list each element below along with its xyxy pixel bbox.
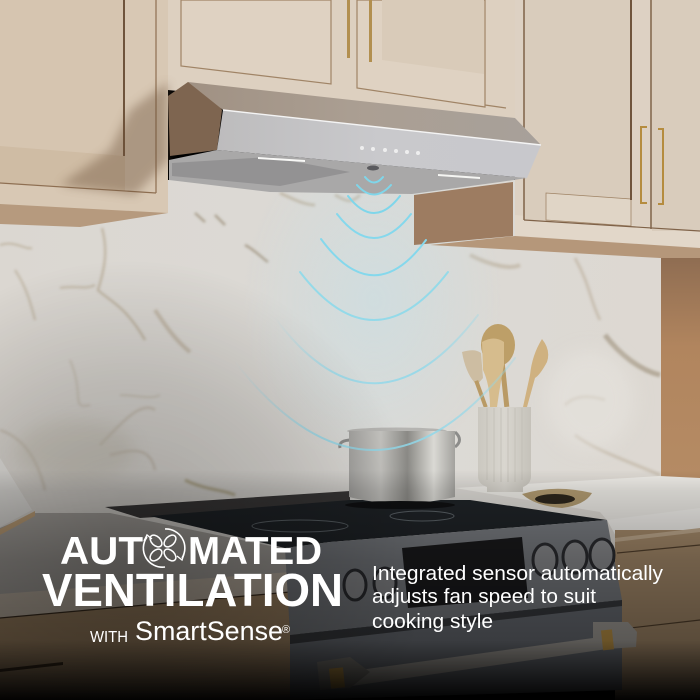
left text shade — [0, 260, 430, 700]
utensil vase — [478, 407, 531, 492]
description text: Integrated sensor automatically — [372, 562, 664, 585]
oven mitt — [522, 489, 592, 508]
subtitle: with SmartSense: WITH — [90, 629, 128, 646]
upper cabinet left — [0, 0, 168, 227]
hood light bar — [258, 157, 305, 162]
hood control buttons — [360, 146, 420, 155]
wooden spatula — [482, 338, 504, 407]
hood light bar right — [438, 174, 480, 179]
upper cabinet centre — [168, 0, 520, 125]
range — [105, 491, 637, 700]
sensor waves — [235, 177, 515, 450]
spoon right — [523, 339, 548, 407]
hood top face — [188, 82, 541, 145]
title line 2: VENTILATION — [42, 564, 343, 616]
description text: cooking style — [372, 610, 493, 633]
wall wood panel — [661, 258, 700, 480]
subtitle: with SmartSense: ® — [282, 624, 290, 636]
counter right — [455, 476, 700, 700]
hood underside — [169, 150, 527, 194]
door handles — [641, 127, 663, 204]
marble backsplash — [0, 130, 700, 550]
subtitle: with SmartSense: SmartSense — [135, 616, 283, 646]
upper cabinet right — [414, 0, 700, 258]
centre door left — [181, 0, 331, 84]
cooktop grates — [105, 491, 350, 518]
hood sensor — [367, 166, 379, 170]
stock pot — [340, 428, 460, 509]
title line 1 left: AUT — [60, 530, 143, 573]
right door two — [652, 0, 700, 231]
knobs — [344, 539, 614, 600]
cooktop glass — [150, 500, 607, 548]
wood side under hood — [414, 182, 513, 245]
hood left side — [168, 82, 222, 156]
drawer handle — [0, 662, 63, 672]
spoon large — [481, 324, 515, 366]
hood front panel — [217, 110, 541, 178]
icon: fan with rotating arrows — [143, 529, 185, 567]
oven handle — [317, 622, 637, 690]
white book and board — [0, 458, 32, 527]
right door one — [524, 0, 631, 220]
description text: adjusts fan speed to suit — [372, 585, 596, 608]
display — [402, 537, 528, 608]
dark bottom overlay — [0, 470, 700, 700]
title line 1 right: MATED — [188, 530, 322, 573]
slotted spatula — [462, 350, 483, 385]
control panel — [285, 520, 622, 635]
oven door — [290, 600, 622, 700]
title — [42, 529, 343, 616]
hood grease filter — [172, 157, 350, 186]
counter left — [0, 458, 300, 700]
description text — [372, 562, 664, 633]
centre door right — [357, 0, 485, 107]
range hood — [168, 82, 541, 194]
utensils — [462, 324, 548, 408]
